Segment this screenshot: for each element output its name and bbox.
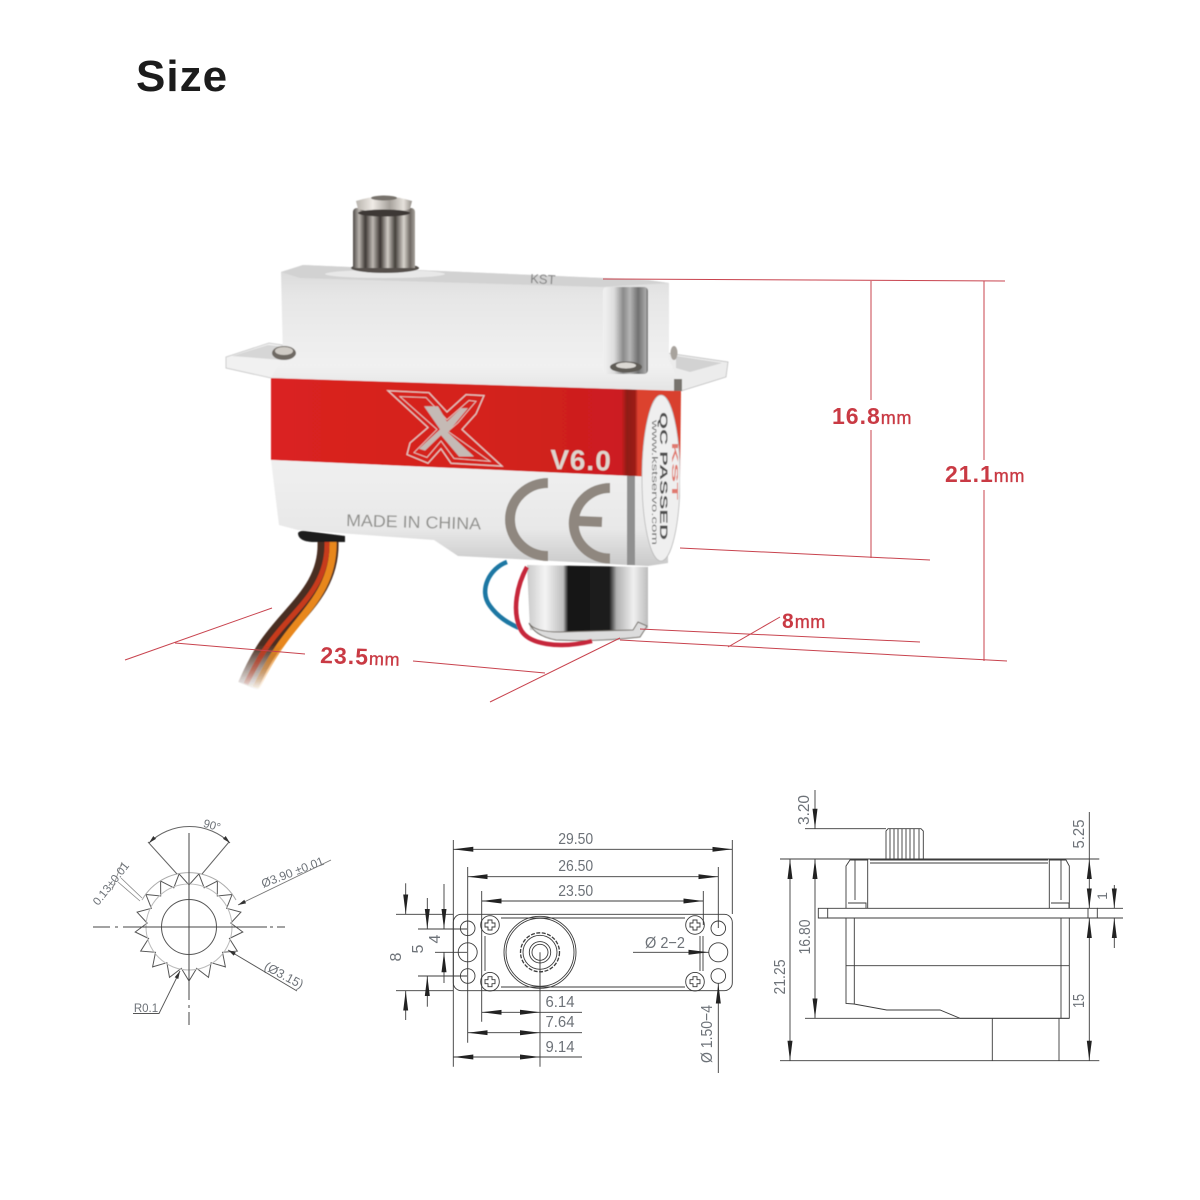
top plate bbox=[870, 860, 1048, 863]
label 23.50: 23.50 bbox=[558, 883, 593, 900]
label 3.20: 3.20 bbox=[796, 795, 813, 825]
height dimensions bbox=[396, 883, 467, 1020]
output shaft bbox=[504, 916, 576, 988]
90 degree angle bbox=[148, 827, 230, 874]
label 4: 4 bbox=[427, 934, 444, 943]
label 26.50: 26.50 bbox=[558, 858, 593, 875]
label 7.64: 7.64 bbox=[546, 1014, 575, 1031]
QC sticker bbox=[642, 395, 680, 561]
outer arc bbox=[142, 873, 236, 900]
inner body bbox=[485, 918, 703, 987]
pinion gear bbox=[353, 196, 415, 272]
offset dimensions bbox=[453, 952, 582, 1067]
motor can bbox=[527, 565, 648, 641]
right mounting flange bbox=[660, 352, 728, 391]
left mounting flange bbox=[226, 343, 296, 378]
flange bbox=[818, 908, 1097, 918]
label diameter 3.90: Ø3.90 ±0.01 bbox=[259, 854, 326, 891]
made in china text: MADE IN CHINA bbox=[346, 511, 482, 534]
pinion base disc bbox=[325, 255, 445, 278]
leader R0.1 bbox=[133, 971, 180, 1014]
pinion bbox=[886, 829, 923, 859]
label 5.25: 5.25 bbox=[1071, 819, 1088, 848]
leader 3.15 bbox=[228, 950, 297, 991]
label 5: 5 bbox=[410, 944, 427, 953]
outline bbox=[453, 914, 732, 991]
hole callout bbox=[633, 951, 708, 953]
label 9.14: 9.14 bbox=[546, 1039, 575, 1056]
flange corner notch bbox=[674, 379, 682, 391]
mounting holes bbox=[458, 921, 728, 983]
cable grommet bbox=[298, 531, 345, 542]
drawing: gear detail bbox=[91, 818, 331, 1025]
servo photo illustration bbox=[226, 196, 728, 688]
gear outline bbox=[135, 874, 243, 981]
center lines bbox=[93, 833, 285, 1025]
pitch circle bbox=[146, 884, 232, 970]
label 90: 90° bbox=[202, 818, 222, 834]
lower silver housing bbox=[271, 460, 668, 566]
label phi 2-2: Ø 2−2 bbox=[645, 935, 685, 952]
motor bbox=[992, 1018, 1059, 1061]
label 15: 15 bbox=[1071, 994, 1088, 1008]
label 29.50: 29.50 bbox=[558, 831, 593, 848]
side bevel strip bbox=[627, 476, 635, 565]
title: Size bbox=[136, 52, 228, 101]
servo upper housing bbox=[271, 265, 681, 391]
drawing: side view bbox=[772, 790, 1123, 1061]
leader 3.90 bbox=[238, 860, 331, 905]
tolerance ticks bbox=[112, 862, 142, 901]
label 16.8mm: 16.8mm bbox=[832, 403, 912, 429]
label 21.25: 21.25 bbox=[772, 959, 789, 994]
label 21.1mm: 21.1mm bbox=[945, 461, 1025, 487]
QC sticker: www.kstservo.com bbox=[650, 418, 659, 546]
width dimensions bbox=[453, 840, 732, 1067]
CE mark bbox=[510, 483, 610, 558]
wire bundle bbox=[246, 541, 333, 688]
QC sticker: KST bbox=[670, 442, 679, 500]
bore circle bbox=[162, 900, 216, 954]
blue wire bbox=[485, 562, 519, 628]
red dimension lines bbox=[125, 279, 1007, 702]
right flange screw bbox=[670, 346, 678, 360]
label diameter 3.15: (Ø3.15) bbox=[262, 959, 306, 992]
X logo bbox=[388, 391, 502, 466]
red band bbox=[271, 378, 681, 478]
extension lines bbox=[780, 829, 1099, 1061]
label phi 1.50-4: Ø 1.50−4 bbox=[699, 1005, 716, 1063]
red wire bbox=[516, 567, 592, 645]
hole callout lower bbox=[717, 984, 719, 1073]
version mark: V6.0 bbox=[550, 444, 612, 477]
label 8: 8 bbox=[388, 952, 405, 961]
top engraving: KST bbox=[530, 271, 556, 287]
QC sticker: QC PASSED bbox=[657, 412, 669, 540]
vertical dimensions bbox=[790, 790, 1123, 1061]
label 23.5mm: 23.5mm bbox=[320, 642, 401, 671]
corner post bbox=[603, 287, 648, 374]
label 8mm: 8mm bbox=[782, 610, 826, 633]
body bbox=[846, 918, 1069, 1018]
label 16.80: 16.80 bbox=[797, 919, 814, 954]
label 6.14: 6.14 bbox=[546, 994, 575, 1011]
top face bbox=[281, 265, 669, 287]
label tolerance: 0.13±0.01 bbox=[91, 860, 132, 908]
drawing: top view bbox=[388, 831, 732, 1073]
posts bbox=[846, 860, 1069, 908]
flange screw bbox=[272, 346, 296, 360]
label R0.1: R0.1 bbox=[134, 1003, 158, 1015]
screws bbox=[481, 916, 704, 991]
label 1: 1 bbox=[1094, 892, 1110, 900]
